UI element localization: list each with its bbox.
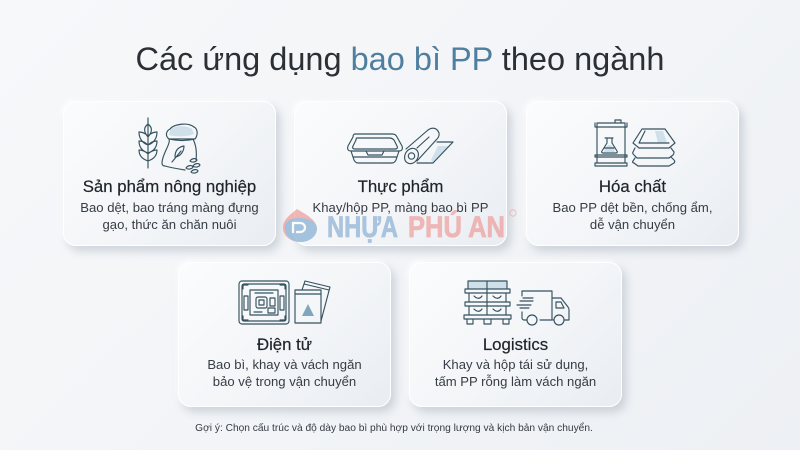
icon: pallet of boxes and delivery truck — [463, 280, 570, 326]
card heading: Logistics — [483, 335, 548, 354]
card description: Khay/hộp PP, màng bao bì PP — [313, 200, 488, 215]
card heading: Hóa chất — [599, 177, 666, 196]
card description: dễ vận chuyển — [590, 216, 675, 232]
card description: tấm PP rỗng làm vách ngăn — [435, 374, 596, 388]
card description — [553, 200, 712, 232]
icon: wheat and grain sack — [138, 117, 200, 174]
card description: Bao dệt, bao tráng màng đựng — [80, 200, 259, 215]
watermark: Nhựa Phú An logo — [283, 209, 516, 244]
watermark: Nhựa Phú An logo: NHỰA — [327, 211, 398, 244]
card description: Bao bì, khay và vách ngăn — [207, 357, 362, 372]
card heading: Điện tử — [257, 335, 312, 354]
card description: gạo, thức ăn chăn nuôi — [102, 216, 236, 232]
card description — [435, 357, 596, 388]
panel: Hóa chất — [526, 101, 739, 246]
card heading: Thực phẩm — [358, 177, 443, 196]
panel: Điện tử — [178, 262, 391, 407]
card description: Bao PP dệt bền, chống ẩm, — [553, 200, 712, 215]
title: Các ứng dụng bao bì PP theo ngành — [136, 41, 664, 77]
card description — [80, 200, 259, 232]
panel: Thực phẩm — [294, 101, 507, 246]
footer hint: Gợi ý: Chọn cấu trúc và độ dày bao bì phù hợp với trọng lượng và kịch bản vận chuyển. — [195, 423, 593, 434]
icon: circuit board and antistatic bags — [238, 280, 330, 325]
icon: food tray and film roll — [347, 128, 454, 164]
panel: Sản phẩm nông nghiệp — [63, 101, 276, 246]
card description: Khay và hộp tái sử dụng, — [443, 357, 588, 372]
card description: bảo vệ trong vận chuyển — [213, 374, 356, 388]
panel: Logistics — [409, 262, 622, 407]
icon: chemical drum and stacked bags — [594, 119, 676, 167]
card heading: Sản phẩm nông nghiệp — [83, 177, 256, 196]
card description — [207, 357, 362, 388]
